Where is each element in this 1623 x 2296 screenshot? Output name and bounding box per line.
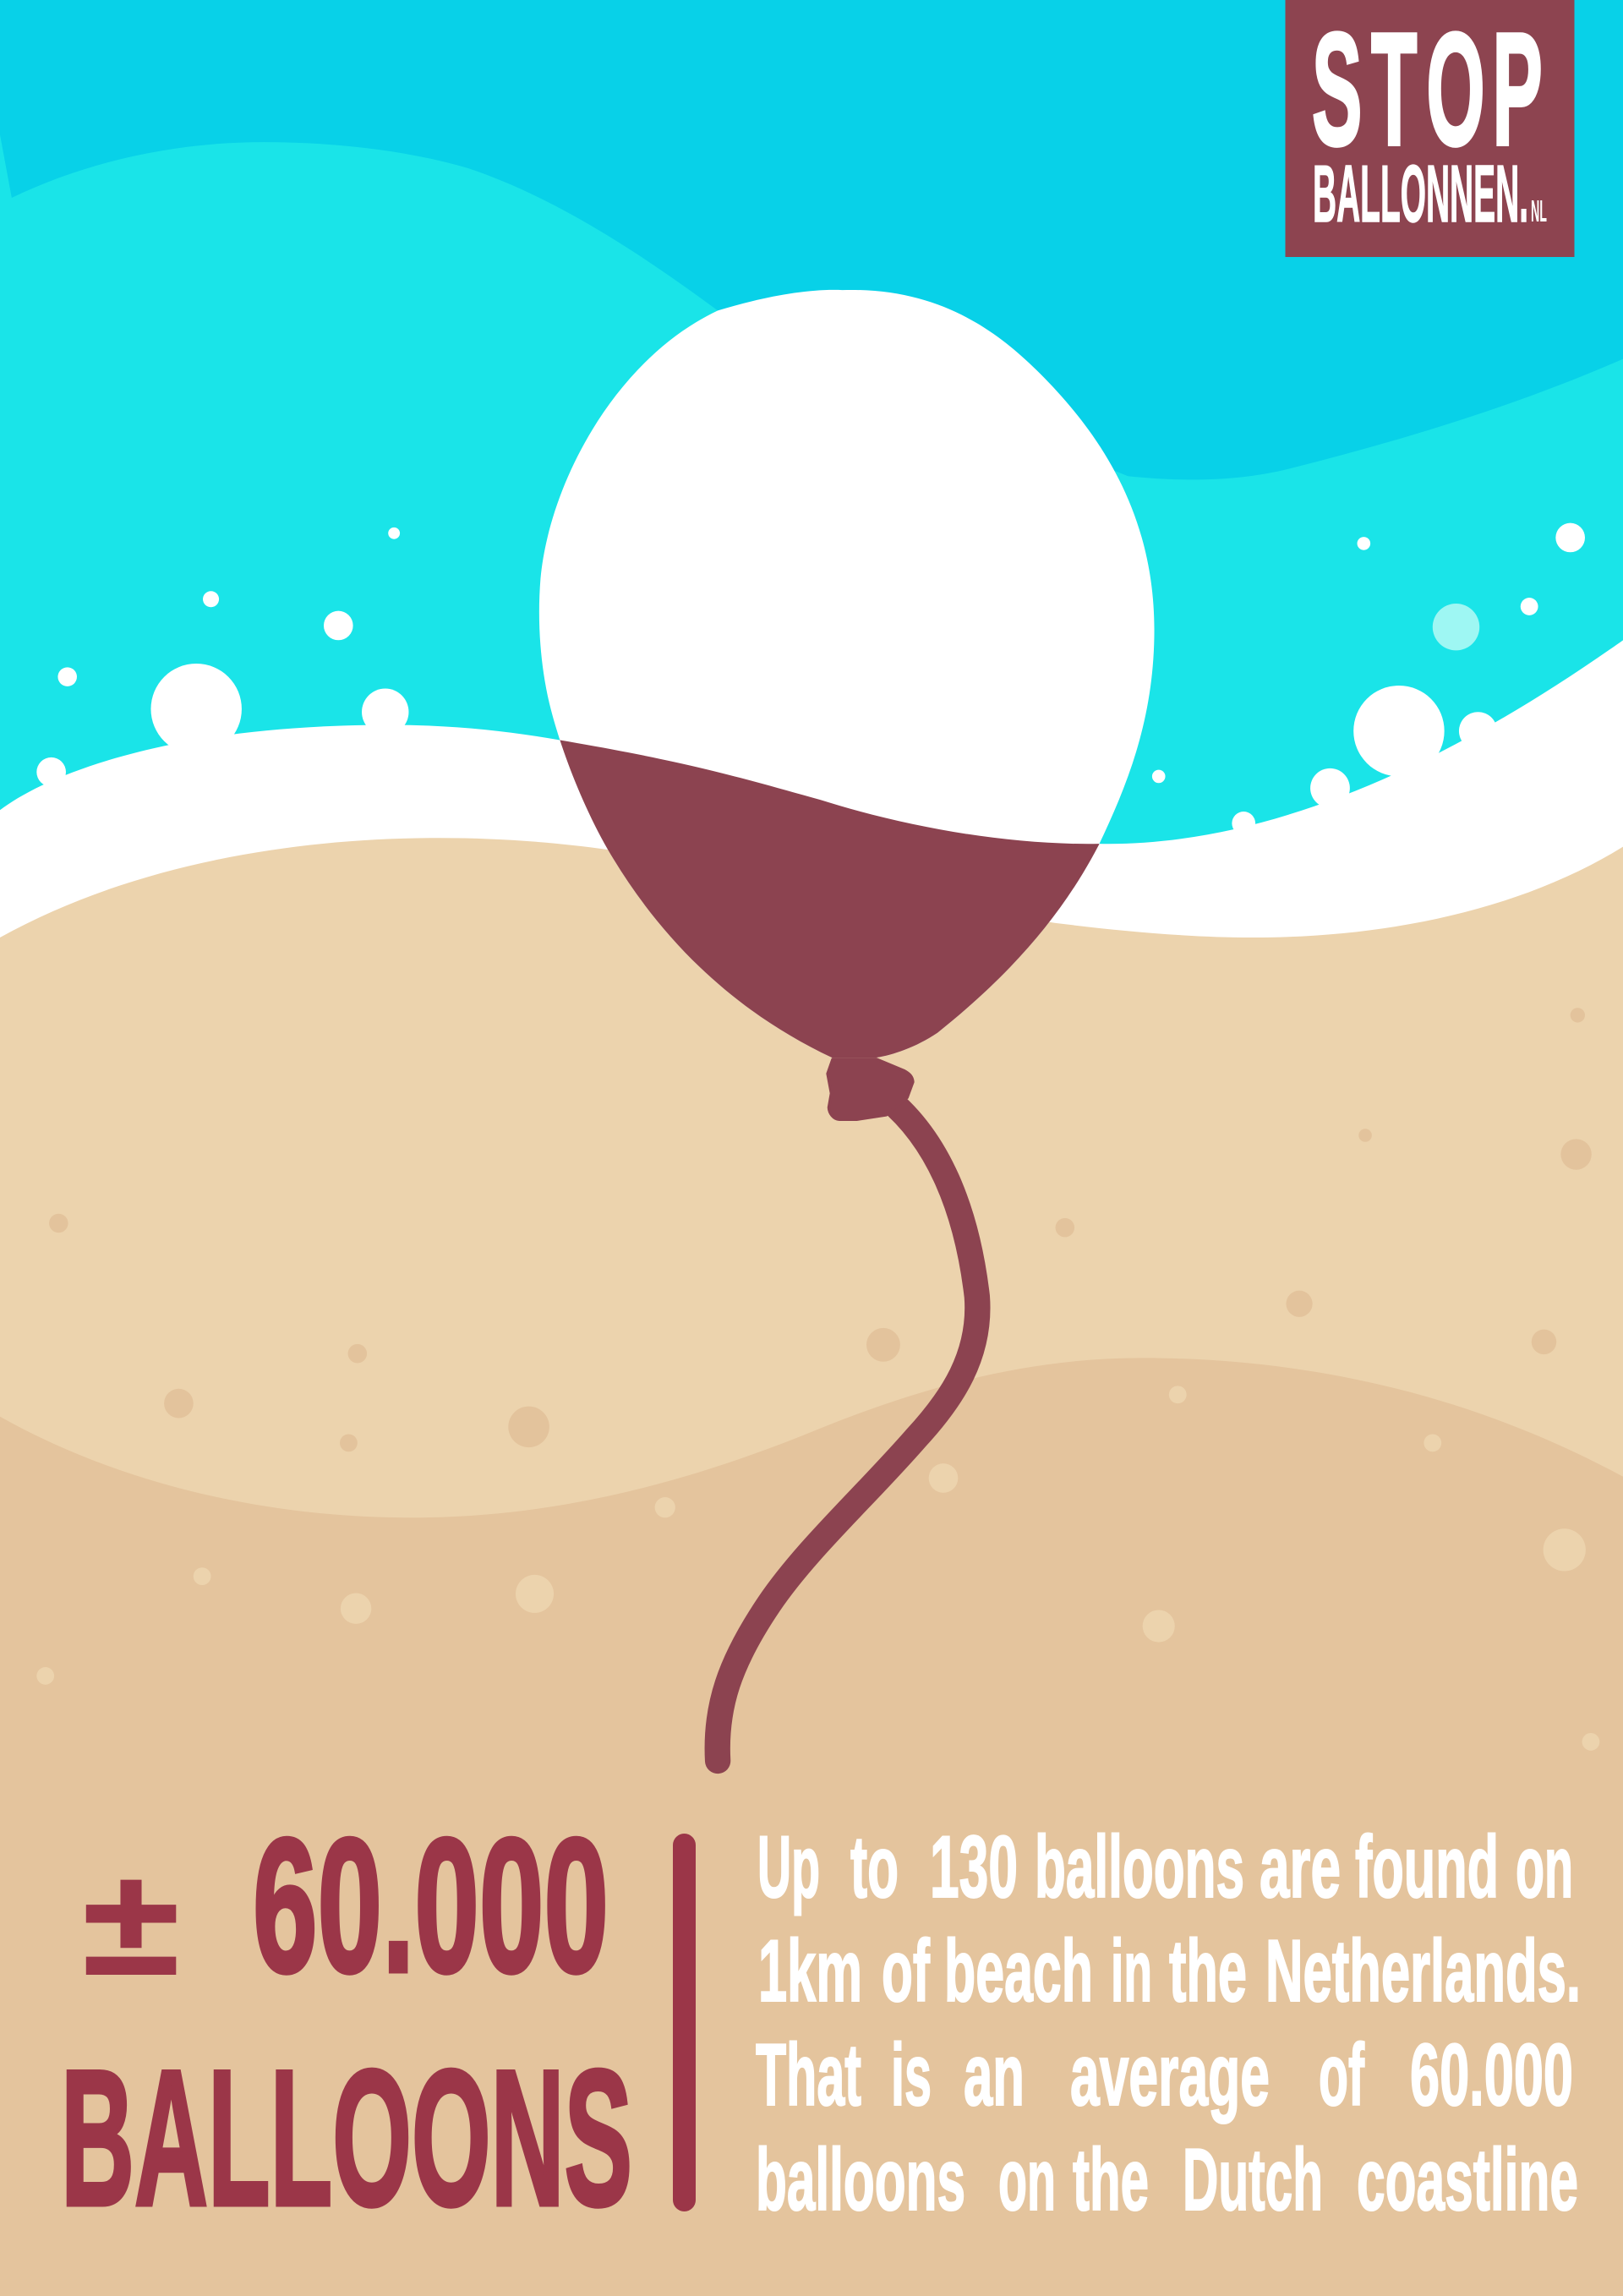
white surf band [0, 640, 1623, 1025]
logo word STOP: STOP [1312, 1, 1543, 179]
line 1: 130 [930, 1818, 1018, 1916]
line 1: Up [757, 1818, 820, 1916]
line 3: of [1319, 2026, 1364, 2124]
line 3 [756, 2026, 1573, 2124]
line 1 [757, 1818, 1573, 1916]
line 4: on [998, 2131, 1056, 2229]
line 2 [758, 1922, 1581, 2020]
line 3: That [756, 2026, 861, 2124]
balloon knot [828, 1059, 913, 1119]
line 2: in [1111, 1922, 1152, 2020]
plus-minus sign: ± [83, 1838, 179, 2006]
dark sand [0, 1358, 1623, 2296]
number 60.000: 60.000 [253, 1798, 609, 2012]
line 2: of [882, 1922, 930, 2020]
vertical divider [673, 1834, 696, 2211]
line 1: to [850, 1818, 899, 1916]
logo: stop ballonnen: NL [1531, 194, 1547, 228]
balloon string [718, 1099, 977, 1761]
balloon white upper part [539, 290, 1155, 1058]
word BALLOONS: BALLOONS [61, 2030, 632, 2246]
logo: stop ballonnen [1285, 0, 1574, 257]
statistic: 60.000 balloons [61, 1798, 632, 2246]
line 3: average [1070, 2026, 1270, 2124]
line 2: the [1169, 1922, 1247, 2020]
dots on light sand [49, 1008, 1592, 1451]
line 4: the [1073, 2131, 1149, 2229]
shallow water wave [0, 134, 1623, 1025]
line 4: balloons [756, 2131, 965, 2229]
line 3: an [964, 2026, 1025, 2124]
line 1: on [1516, 1818, 1573, 1916]
sea foam bubbles [36, 523, 1585, 835]
balloon maroon lower part [560, 741, 1099, 1058]
line 3: is [891, 2026, 932, 2124]
light sand [0, 838, 1623, 2296]
description text [756, 1818, 1581, 2229]
line 2: beach [944, 1922, 1093, 2020]
line 1: found [1355, 1818, 1499, 1916]
balloon [539, 290, 1155, 1761]
line 1: balloons [1035, 1818, 1244, 1916]
line 1: are [1260, 1818, 1341, 1916]
dots on dark sand [36, 1386, 1599, 1751]
line 2: 1km [758, 1922, 862, 2020]
line 4 [756, 2131, 1578, 2229]
logo background [1285, 0, 1574, 257]
line 4: Dutch [1183, 2131, 1323, 2229]
